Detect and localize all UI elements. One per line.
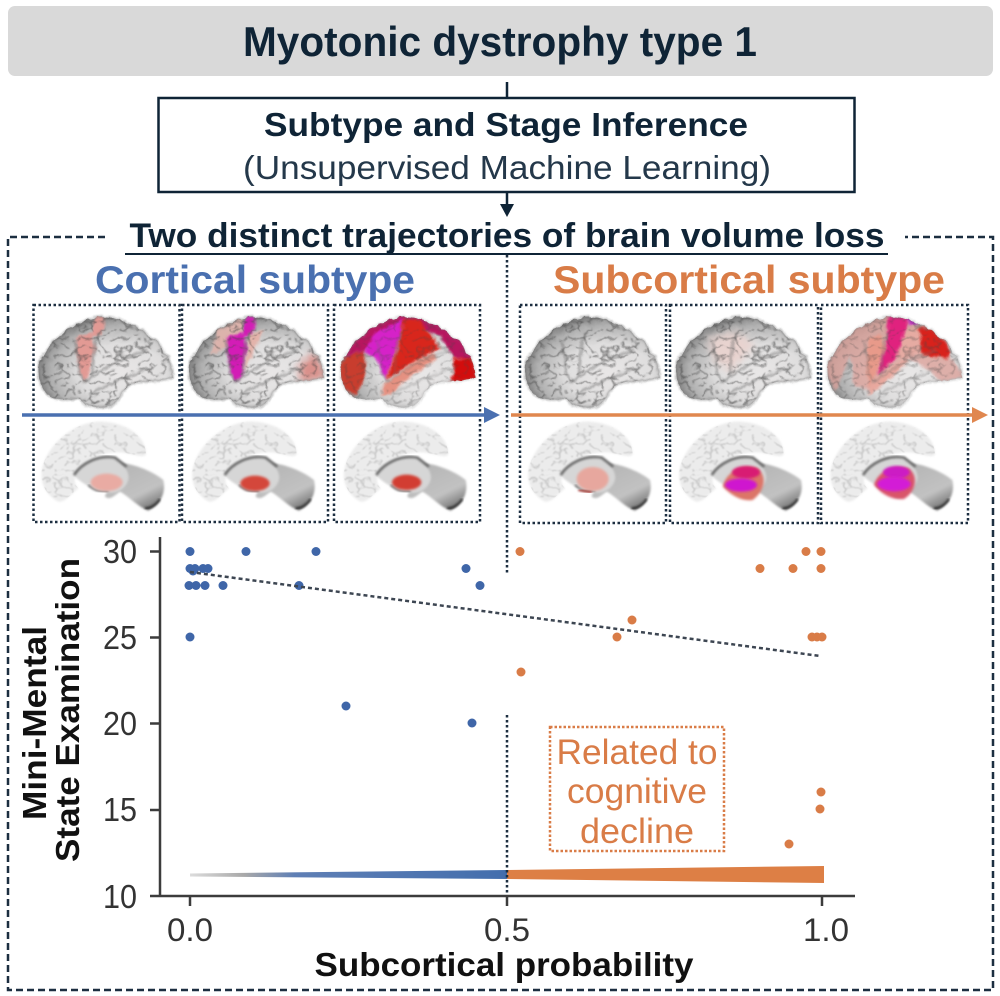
cortical stage 3 medial brain <box>341 420 466 511</box>
callout: Related to <box>556 733 718 772</box>
central dotted divider lower <box>506 715 508 893</box>
subcortical stage 2 lateral brain <box>671 312 814 412</box>
x tick labels: 0.5 <box>484 912 530 948</box>
y tick labels <box>103 533 137 915</box>
y tick labels: 10 <box>103 878 137 915</box>
heading: subcortical subtype: Subcortical subtype <box>553 259 945 302</box>
x tick labels <box>167 912 849 948</box>
panel: cortical subtype stages <box>22 305 500 522</box>
y tick labels: 25 <box>103 619 137 656</box>
y axis title <box>16 558 86 862</box>
y tick labels: 30 <box>103 533 137 570</box>
probability wedge <box>190 866 824 883</box>
subcortical stage 3 lateral brain <box>822 312 966 412</box>
chart: MMSE vs subcortical probability <box>16 533 855 983</box>
cortical stage 2 lateral brain <box>184 312 327 412</box>
connector from title to method box <box>506 82 508 98</box>
title banner <box>8 6 993 76</box>
arrow from method box to results <box>500 192 514 217</box>
y axis title: Mini-Mental <box>16 626 53 820</box>
y axis title: State Examination <box>49 558 86 862</box>
cortical stage 2 medial brain <box>189 420 315 511</box>
central dotted divider upper <box>506 255 508 575</box>
x axis title: Subcortical probability <box>314 946 694 983</box>
callout: decline <box>580 812 694 851</box>
method box: (Unsupervised Machine Learning) <box>243 149 771 186</box>
subcortical stage 1 medial brain <box>525 420 651 511</box>
results heading: Two distinct trajectories of brain volume loss <box>130 217 884 255</box>
arrow: cortical progression <box>22 407 500 423</box>
heading: cortical subtype: Cortical subtype <box>95 259 415 302</box>
subcortical stage frames <box>520 305 968 523</box>
subcortical stage 2 medial brain <box>676 420 802 511</box>
cortical stage 1 lateral brain <box>33 312 177 412</box>
orange points <box>516 547 826 848</box>
cortical stage 1 medial brain <box>38 420 164 511</box>
stage frames <box>34 305 480 522</box>
callout: cognitive <box>567 772 707 811</box>
axes <box>150 537 855 906</box>
blue points <box>184 547 484 728</box>
cortical stage 3 lateral brain <box>339 314 477 410</box>
x tick labels: 1.0 <box>803 912 849 948</box>
panel: subcortical subtype stages <box>511 305 988 523</box>
method box: Subtype and Stage Inference <box>264 106 748 143</box>
dashed results frame <box>8 237 993 990</box>
callout <box>550 727 724 851</box>
brains: cortical series <box>33 308 482 511</box>
method box <box>158 98 854 192</box>
trend line <box>190 572 820 656</box>
title banner: Myotonic dystrophy type 1 <box>243 18 757 65</box>
subcortical stage 1 lateral brain <box>520 312 663 412</box>
subcortical stage 3 medial brain <box>827 420 953 511</box>
y tick labels: 15 <box>103 791 137 828</box>
y tick labels: 20 <box>103 705 137 742</box>
brains: subcortical series <box>520 312 966 511</box>
x tick labels: 0.0 <box>167 912 213 948</box>
arrow: subcortical progression <box>511 407 988 423</box>
